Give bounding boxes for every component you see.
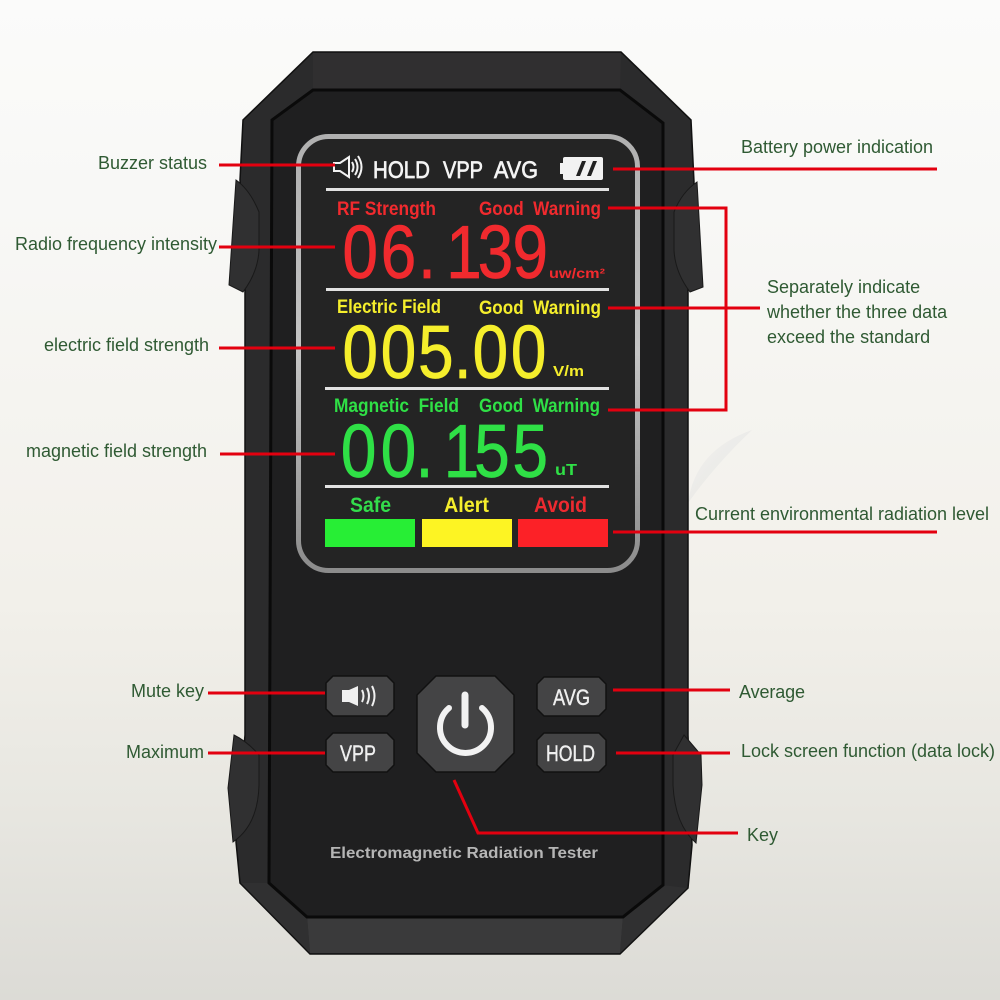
status row: AVG	[494, 157, 538, 184]
magnetic field reading: uT	[555, 462, 577, 479]
electric field reading: 005.00	[343, 310, 546, 394]
label: battery power indication: Battery power indication	[741, 137, 933, 157]
label: magnetic field strength: magnetic field strength	[26, 441, 207, 461]
label: separately indicate: Separately indicate	[767, 277, 920, 297]
label: key: Key	[747, 825, 778, 845]
label: lock screen function: Lock screen function (data lock)	[741, 741, 995, 761]
screen	[298, 136, 638, 570]
RF strength reading	[337, 199, 605, 294]
button: AVG	[537, 677, 606, 716]
electric field reading	[337, 297, 601, 394]
label: electric field strength: electric field strength	[44, 335, 209, 355]
magnetic field reading: Good Warning	[479, 396, 600, 417]
callout lines	[208, 165, 937, 833]
label: average: Average	[739, 682, 805, 702]
button: HOLD: HOLD	[546, 741, 595, 766]
RF strength reading: RF Strength	[337, 199, 436, 220]
button: VPP: VPP	[340, 741, 376, 766]
device name: Electromagnetic Radiation Tester	[330, 845, 598, 862]
label: mute key: Mute key	[131, 681, 204, 701]
outer shell	[236, 52, 694, 954]
status row	[334, 156, 603, 184]
button: AVG: AVG	[553, 685, 590, 710]
radiation level bar: Avoid	[534, 494, 587, 517]
shell highlight bands	[313, 53, 621, 90]
icon: buzzer	[334, 156, 362, 178]
radiation level bar: Alert	[444, 494, 489, 517]
RF strength reading: Good Warning	[479, 199, 601, 220]
label: maximum: Maximum	[126, 742, 204, 762]
status labels: HOLD	[373, 157, 430, 184]
icon: battery	[560, 157, 603, 180]
icon: power	[440, 708, 491, 753]
radiation level bar: Safe	[350, 494, 391, 517]
button: VPP	[326, 733, 394, 772]
label: current environmental radiation level: Current environmental radiation level	[695, 504, 989, 524]
front panel	[269, 90, 663, 917]
button: HOLD	[537, 733, 606, 772]
status row: VPP	[443, 157, 483, 184]
magnetic field reading	[334, 396, 600, 493]
electric field reading: Good Warning	[479, 298, 601, 319]
electric field reading: V/m	[553, 363, 584, 380]
label: buzzer status: Buzzer status	[98, 153, 207, 173]
device body	[228, 52, 703, 954]
label: separately indicate: exceed the standard	[767, 327, 930, 347]
button: power	[417, 676, 514, 772]
electric field reading: Electric Field	[337, 297, 441, 318]
RF strength reading: uw/cm²	[549, 265, 605, 281]
label: radio frequency intensity: Radio frequency intensity	[15, 234, 217, 254]
label: separately indicate: whether the three data	[766, 302, 948, 322]
magnetic field reading: 00.155	[341, 409, 548, 493]
side grips	[228, 180, 703, 843]
RF strength reading: 06.139	[343, 210, 548, 294]
dividers	[325, 188, 609, 488]
magnetic field reading: Magnetic Field	[334, 396, 459, 417]
radiation level bar	[325, 494, 608, 547]
button: mute	[326, 676, 394, 716]
